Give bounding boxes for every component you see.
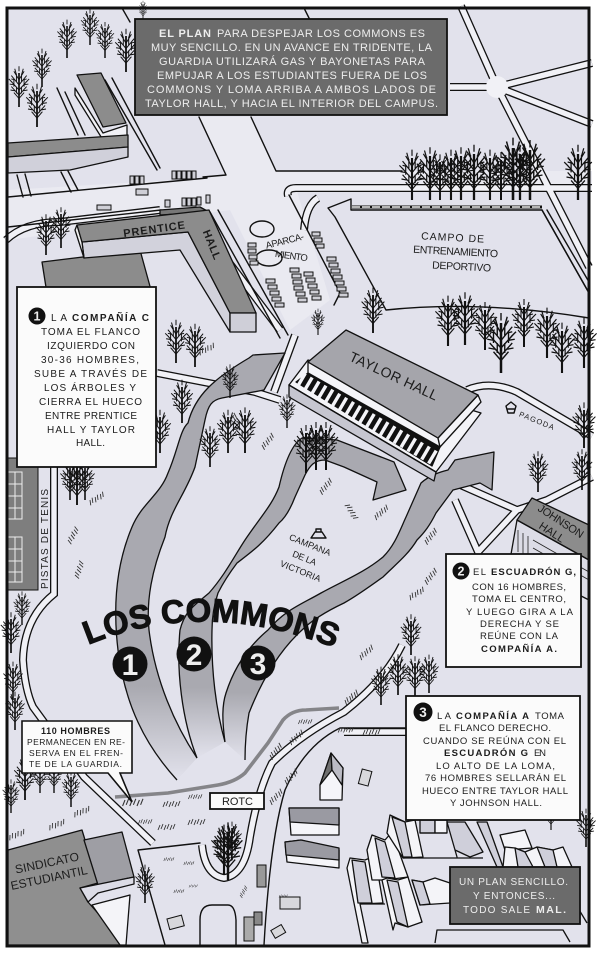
label: Campana de la Victoria bbox=[279, 529, 332, 584]
title: Los Commons: LOS COMMONS bbox=[81, 598, 340, 646]
callout 2: Escuadrón G: DERECHA Y SE bbox=[480, 619, 559, 630]
heading panel: El plan: TAYLOR HALL, Y HACIA EL INTERIOR DEL CAMPUS. bbox=[145, 98, 438, 110]
route number 2: 2 bbox=[186, 639, 202, 672]
callout 3: Compañía A: CUANDO SE REÚNA CON EL bbox=[423, 736, 566, 747]
building: Taylor Hall bbox=[289, 330, 481, 481]
callout: 110 hombres bbox=[22, 721, 132, 802]
callout 1: Compañía C: TOMA EL FLANCO bbox=[41, 327, 140, 338]
callout 1: Compañía C: HALL. bbox=[76, 438, 105, 449]
callout 1: Compañía C: LOS ÁRBOLES Y bbox=[44, 381, 136, 394]
arrow 3: Compañía A route bbox=[223, 452, 494, 760]
callout 2: Escuadrón G: TOMA EL CENTRO, bbox=[472, 594, 566, 605]
callout: 110 hombres: SERVA EN EL FREN- bbox=[29, 748, 123, 758]
callout 3: Compañía A bbox=[406, 696, 580, 820]
label: ROTC: ROTC bbox=[222, 796, 253, 808]
callout 3: Compañía A: 76 HOMBRES SELLARÁN EL bbox=[425, 773, 566, 784]
heading panel: El plan: PARA DESPEJAR LOS COMMONS ES bbox=[217, 28, 425, 40]
label: ROTC bbox=[210, 793, 264, 809]
callout 1: Compañía C: LA bbox=[51, 313, 67, 324]
callout 2: Escuadrón G: CON 16 HOMBRES, bbox=[472, 582, 566, 593]
callout 1: Compañía C: ENTRE PRENTICE bbox=[45, 411, 137, 422]
callout 3: Compañía A: HUECO ENTRE TAYLOR HALL bbox=[422, 786, 568, 797]
heading panel: El plan bbox=[135, 19, 447, 115]
tennis courts: PISTAS DE TENIS bbox=[40, 489, 51, 589]
callout: 110 hombres: 110 HOMBRES bbox=[41, 726, 110, 736]
callout 3: Compañía A: LO ALTO DE LA LOMA, bbox=[436, 761, 555, 772]
closing panel: MAL. bbox=[536, 904, 566, 916]
heading panel: El plan: GUARDIA UTILIZARÁ GAS Y BAYONETAS PARA bbox=[159, 55, 426, 68]
closing panel: Y ENTONCES... bbox=[473, 891, 555, 902]
building: Johnson Hall bbox=[510, 498, 589, 600]
campo de entrenamiento deportivo: ENTRENAMIENTO bbox=[413, 244, 498, 260]
route number 2 bbox=[176, 636, 212, 672]
callout 1: Compañía C: COMPAÑÍA C bbox=[72, 311, 149, 324]
building: Sindicato Estudiantil: ESTUDIANTIL bbox=[9, 863, 89, 893]
callout 1: Compañía C: 30-36 HOMBRES, bbox=[41, 355, 139, 366]
callout 1: Compañía C: IZQUIERDO CON bbox=[47, 341, 135, 352]
heading panel: El plan: MUY SENCILLO. EN UN AVANCE EN TRIDENTE, LA bbox=[151, 42, 433, 54]
route number 3 bbox=[240, 646, 276, 681]
callout 2: Escuadrón G: COMPAÑÍA A. bbox=[481, 644, 557, 655]
label: Campana de la Victoria: VICTORIA bbox=[279, 558, 322, 584]
callout 2: Escuadrón G: REÚNE CON LA bbox=[480, 631, 559, 642]
label: Campana de la Victoria: CAMPANA bbox=[288, 532, 332, 558]
building: Taylor Hall: TAYLOR HALL bbox=[347, 348, 441, 403]
building: Sindicato Estudiantil bbox=[8, 830, 134, 945]
callout 3: Compañía A: ESCUADRÓN G bbox=[444, 747, 528, 759]
number badge 3 bbox=[414, 702, 432, 722]
building: Johnson Hall: JOHNSON bbox=[535, 503, 586, 541]
tennis courts bbox=[8, 458, 51, 590]
callout 3: Compañía A: TOMA bbox=[535, 711, 565, 722]
arrow 1: Compañía C route bbox=[116, 353, 285, 780]
callout 2: Escuadrón G bbox=[446, 554, 581, 667]
campo de entrenamiento deportivo: CAMPO DE bbox=[421, 230, 484, 246]
bottom right campus buildings bbox=[347, 815, 587, 943]
heading panel: El plan: EL PLAN bbox=[159, 28, 211, 40]
building: top left dormitory bbox=[8, 73, 160, 197]
campo de entrenamiento deportivo bbox=[328, 199, 589, 318]
number badge 2: 2 bbox=[458, 564, 465, 578]
route number 1: 1 bbox=[122, 649, 138, 682]
closing panel: UN PLAN SENCILLO. bbox=[459, 877, 568, 888]
label: Campana de la Victoria: DE LA bbox=[291, 549, 318, 568]
callout 3: Compañía A: EN bbox=[534, 748, 546, 759]
aparcamiento: label and cars bbox=[97, 171, 348, 307]
aparcamiento: label and cars: MIENTO bbox=[274, 249, 308, 264]
vehicles bbox=[167, 769, 372, 941]
route number 1 bbox=[112, 646, 148, 682]
building: Prentice Hall: HALL bbox=[200, 228, 223, 262]
number badge 1 bbox=[28, 308, 46, 324]
heading panel: El plan: COMMONS Y LOMA ARRIBA A AMBOS LADOS DE bbox=[147, 84, 436, 96]
number badge 1: 1 bbox=[34, 310, 41, 324]
heading panel: El plan: EMPUJAR A LOS ESTUDIANTES FUERA DE LOS bbox=[157, 70, 427, 82]
callout 2: Escuadrón G: Y LUEGO GIRA A LA bbox=[466, 607, 574, 618]
campo de entrenamiento deportivo: DEPORTIVO bbox=[432, 259, 491, 275]
closing panel: TODO SALE bbox=[463, 905, 530, 916]
lower buildings: barn and huts bbox=[285, 753, 343, 868]
reserve guard line bbox=[115, 708, 339, 797]
grass hatching bbox=[8, 343, 438, 898]
callout 3: Compañía A: Y JOHNSON HALL. bbox=[450, 798, 542, 809]
aparcamiento: label and cars: APARCA- bbox=[265, 232, 305, 252]
callout 1: Compañía C: HALL Y TAYLOR bbox=[47, 425, 135, 436]
callout: 110 hombres: TE DE LA GUARDIA. bbox=[29, 759, 122, 769]
callout 3: Compañía A: COMPAÑÍA A bbox=[456, 711, 529, 722]
building: Johnson Hall: HALL bbox=[536, 520, 566, 545]
label: Pagoda: PAGODA bbox=[518, 410, 555, 432]
callout: 110 hombres: PERMANECEN EN RE- bbox=[27, 737, 125, 747]
callout 1: Compañía C bbox=[17, 287, 156, 467]
building: Sindicato Estudiantil: SINDICATO bbox=[14, 849, 80, 877]
callout 3: Compañía A: EL FLANCO DERECHO. bbox=[439, 723, 551, 734]
callout 2: Escuadrón G: EL bbox=[473, 567, 486, 578]
callout 3: Compañía A: LA bbox=[437, 711, 452, 722]
building: Prentice Hall: PRENTICE bbox=[123, 220, 186, 240]
arrow 2: Escuadrón G route bbox=[179, 438, 406, 758]
callout 2: Escuadrón G: ESCUADRÓN G, bbox=[491, 566, 576, 578]
callout 1: Compañía C: SUBE A TRAVÉS DE bbox=[34, 367, 147, 380]
number badge 3: 3 bbox=[419, 705, 427, 720]
callout 1: Compañía C: CIERRA EL HUECO bbox=[39, 397, 142, 408]
route number 3: 3 bbox=[250, 648, 266, 681]
closing panel bbox=[450, 867, 580, 924]
building: Prentice Hall bbox=[42, 207, 288, 338]
label: Pagoda bbox=[506, 402, 555, 432]
